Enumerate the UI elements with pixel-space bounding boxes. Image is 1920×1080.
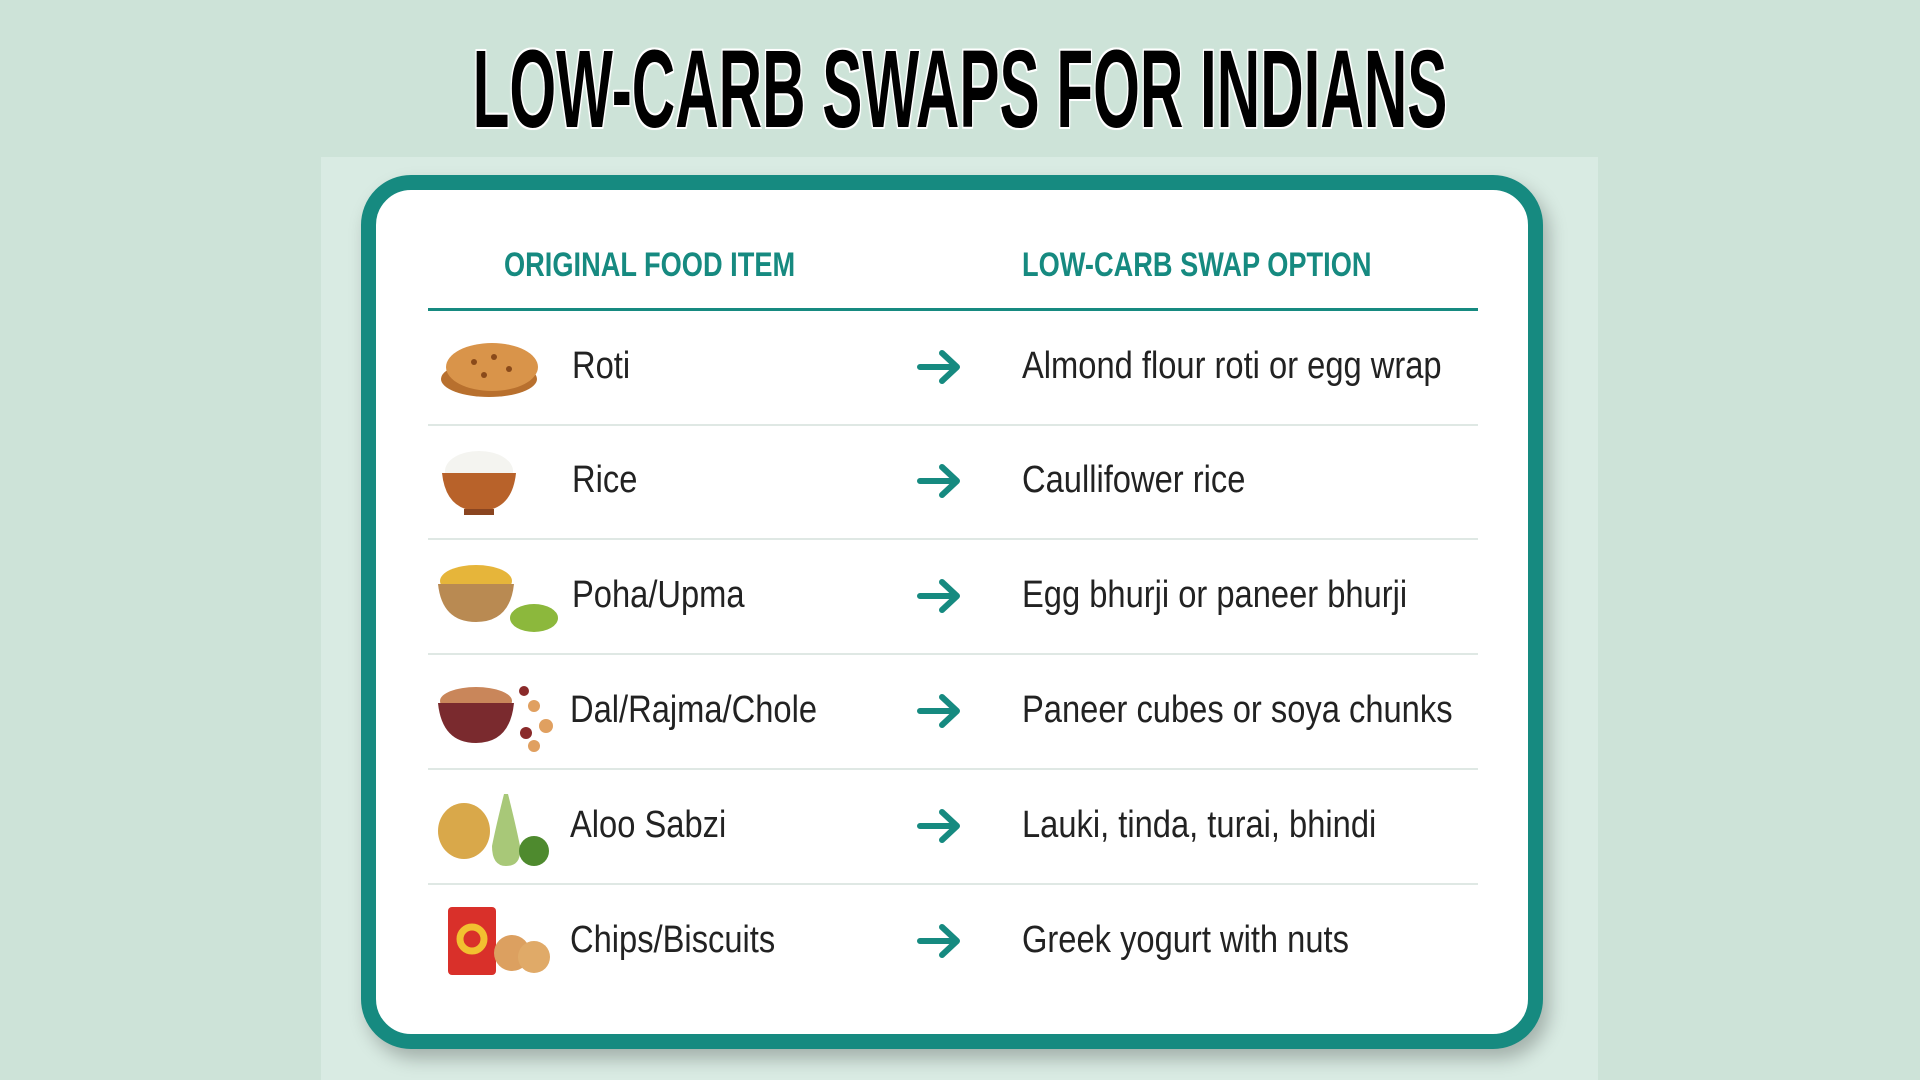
icon: roti — [441, 343, 538, 397]
panel: swap table card — [361, 175, 1543, 1049]
arrow — [917, 924, 960, 958]
icon: rice bowl — [442, 451, 516, 515]
row: dal: Dal/Rajma/Chole — [570, 689, 817, 731]
row: roti — [441, 343, 1442, 397]
row: dal: Paneer cubes or soya chunks — [1022, 689, 1453, 731]
row: poha: Poha/Upma — [572, 574, 745, 616]
row: chips: Chips/Biscuits — [570, 919, 775, 961]
icon: poha bowl — [438, 565, 558, 632]
row: aloo — [438, 794, 1376, 866]
arrow — [917, 694, 960, 728]
icon: vegetables — [438, 794, 549, 866]
arrow — [917, 350, 960, 384]
heading: original food item: ORIGINAL FOOD ITEM — [504, 246, 795, 284]
row: poha: Egg bhurji or paneer bhurji — [1022, 574, 1407, 616]
row: roti: Almond flour roti or egg wrap — [1022, 345, 1442, 387]
row: chips — [448, 907, 1349, 975]
title: LOW-CARB SWAPS FOR INDIANS — [473, 28, 1447, 151]
row: rice: Caullifower rice — [1022, 459, 1245, 501]
row: roti: Roti — [572, 345, 630, 387]
arrow — [917, 464, 960, 498]
row: rice: Rice — [572, 459, 637, 501]
row: aloo: Lauki, tinda, turai, bhindi — [1022, 804, 1376, 846]
row: rice — [442, 451, 1245, 515]
arrow — [917, 809, 960, 843]
heading: low-carb swap option: LOW-CARB SWAP OPTION — [1022, 246, 1372, 284]
arrow — [917, 579, 960, 613]
icon: chips and biscuits — [448, 907, 550, 975]
row: poha — [438, 565, 1407, 632]
row: aloo: Aloo Sabzi — [570, 804, 726, 846]
row: chips: Greek yogurt with nuts — [1022, 919, 1349, 961]
icon: dal and beans — [438, 686, 553, 752]
row: dal — [438, 686, 1453, 752]
